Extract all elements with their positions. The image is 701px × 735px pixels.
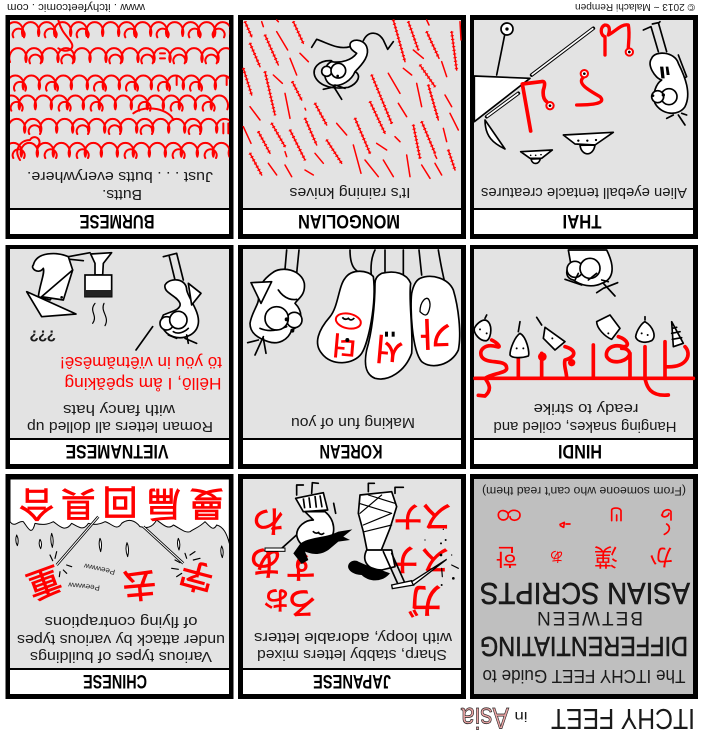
loopy and stabby letters with samurai figures: わ bbox=[253, 503, 284, 537]
sample scripts in red: か bbox=[650, 543, 674, 570]
heading: Asian scripts: ASIAN SCRIPTS bbox=[480, 576, 690, 611]
heading: Vietnamese: VIETNAMESE bbox=[66, 440, 168, 461]
panel: Chinese bbox=[6, 474, 234, 699]
caption bbox=[17, 613, 225, 665]
balloons with Korean letters and cat: 가 bbox=[419, 313, 451, 351]
panel: Hindi bbox=[470, 245, 698, 469]
buildings skyline and flying contraptions: 合 bbox=[19, 483, 54, 521]
heading: Mongolian: MONGOLIAN bbox=[298, 210, 400, 231]
panel: title bbox=[470, 474, 698, 699]
fancy hats, cat and speech line: ??? bbox=[29, 327, 56, 344]
comic title: Asia bbox=[461, 701, 509, 734]
sample scripts in red bbox=[496, 508, 674, 570]
heading: Thai: THAI bbox=[562, 210, 602, 231]
loopy and stabby letters with samurai figures: ろ bbox=[286, 586, 317, 621]
alien ship, saucers, tentacle letters and cat bbox=[474, 22, 688, 163]
loopy and stabby letters with samurai figures: ス bbox=[421, 498, 453, 534]
loopy and stabby letters with samurai figures: ナ bbox=[388, 542, 419, 577]
caption: Roman letters all dolled up bbox=[27, 418, 213, 435]
balloons with Korean letters and cat bbox=[248, 250, 460, 379]
buildings skyline and flying contraptions: 具 bbox=[61, 483, 96, 521]
speech in decorated Vietnamese: tö yöu in vïêtnǎmêsê! bbox=[60, 353, 222, 372]
caption bbox=[27, 168, 213, 203]
caption: ready to strike bbox=[534, 400, 638, 417]
caption: Hanging snakes, coiled and bbox=[494, 418, 676, 435]
fancy hats, cat and speech line bbox=[27, 253, 201, 350]
buildings skyline and flying contraptions: 字 bbox=[176, 553, 218, 597]
raining knives script and cat bbox=[243, 20, 461, 178]
balloons with Korean letters and cat: 서 bbox=[374, 330, 405, 366]
panel: Japanese bbox=[238, 474, 466, 699]
website credit: www . itchyfeetcomic . com bbox=[7, 1, 146, 13]
comic title: in bbox=[514, 709, 528, 725]
loopy and stabby letters with samurai figures bbox=[249, 483, 458, 621]
balloons with Korean letters and cat: 더 bbox=[331, 329, 357, 361]
buildings skyline and flying contraptions bbox=[10, 479, 229, 604]
between: BETWEEN bbox=[537, 607, 643, 628]
heading: differentiating: DIFFERENTIATING bbox=[480, 631, 688, 662]
buildings skyline and flying contraptions: 曼 bbox=[189, 483, 224, 521]
buildings skyline and flying contraptions: Peewww bbox=[67, 580, 100, 593]
guide line: The ITCHY FEET Guide to bbox=[482, 666, 686, 686]
caption: of flying contraptions bbox=[44, 613, 198, 630]
panel: Korean bbox=[238, 245, 466, 469]
caption: Sharp, stabby letters mixed bbox=[257, 646, 447, 663]
sample scripts in red: 漢 bbox=[594, 543, 618, 570]
caption bbox=[494, 400, 676, 435]
sample scripts in red: 한 bbox=[496, 544, 517, 570]
caption: Just . . . butts everywhere. bbox=[27, 168, 213, 185]
speech in decorated Vietnamese: Hêllô, I åm spêǎking bbox=[64, 374, 222, 393]
Burmese script loops bbox=[3, 20, 247, 160]
speech in decorated Vietnamese bbox=[60, 353, 222, 393]
loopy and stabby letters with samurai figures: ナ bbox=[394, 499, 423, 532]
panel: Burmese bbox=[3, 15, 247, 239]
heading: Hindi: HINDI bbox=[558, 440, 602, 461]
caption: with loopy, adorable letters bbox=[254, 629, 453, 646]
caption: Alien eyeball tentacle creatures bbox=[481, 184, 687, 201]
snake letters and cat bbox=[474, 250, 693, 396]
panel: Mongolian bbox=[238, 15, 466, 239]
comic title: ITCHY FEET bbox=[551, 702, 695, 734]
caption bbox=[254, 629, 453, 663]
caption: under attack by various types bbox=[17, 631, 225, 648]
loopy and stabby letters with samurai figures: ガ bbox=[407, 580, 443, 621]
caption: Various types of buildings bbox=[30, 648, 212, 665]
caption: Making fun of you bbox=[291, 414, 415, 431]
buildings skyline and flying contraptions: 去 bbox=[121, 564, 157, 603]
loopy and stabby letters with samurai figures: あ bbox=[249, 543, 282, 580]
buildings skyline and flying contraptions: 扁 bbox=[146, 483, 181, 521]
comic title bbox=[461, 701, 695, 734]
caption bbox=[27, 401, 213, 435]
buildings skyline and flying contraptions: 回 bbox=[103, 481, 137, 519]
copyright credit: © 2013 ~ Malachi Rempen bbox=[575, 1, 695, 12]
panel: Thai bbox=[470, 15, 698, 239]
caption: with fancy hats bbox=[63, 401, 176, 418]
buildings skyline and flying contraptions: Peewww bbox=[82, 561, 116, 577]
loopy and stabby letters with samurai figures: ス bbox=[420, 542, 450, 575]
tagline: (From someone who can't read them) bbox=[482, 484, 686, 498]
panel: Vietnamese bbox=[6, 245, 234, 469]
heading: Korean: KOREAN bbox=[320, 440, 382, 461]
sample scripts in red: あ bbox=[550, 548, 564, 564]
caption: It's raining knives bbox=[290, 184, 410, 201]
buildings skyline and flying contraptions: 重 bbox=[22, 558, 66, 604]
heading: Japanese: JAPANESE bbox=[313, 670, 391, 691]
heading: Chinese: CHINESE bbox=[83, 670, 147, 691]
loopy and stabby letters with samurai figures: お bbox=[264, 585, 289, 613]
heading: Burmese: BURMESE bbox=[80, 210, 154, 231]
loopy and stabby letters with samurai figures: す bbox=[286, 549, 316, 583]
caption: Butts. bbox=[102, 186, 142, 203]
